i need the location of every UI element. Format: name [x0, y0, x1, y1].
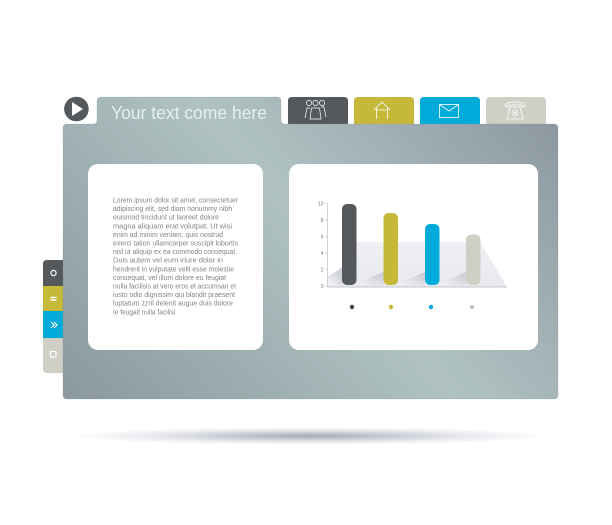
tab: home: [354, 97, 414, 124]
y axis: [318, 201, 328, 290]
text block: nisl ut aliquip ex ea commodo consequat.: [113, 249, 237, 256]
y axis: 10: [318, 201, 324, 207]
bar: 6: [466, 234, 480, 285]
text block: nulla facilisis at vero eros et accumsan et: [113, 284, 236, 290]
side tab: equals: [43, 286, 64, 311]
text block: hendrerit in vulputate velit esse molestie: [113, 266, 234, 273]
main panel with title tab: [63, 97, 558, 399]
y axis: 8: [321, 218, 324, 224]
y axis: 0: [321, 284, 324, 290]
text block: iusto odio dignissim qui blandit praesent: [113, 292, 235, 299]
bar: 10: [342, 204, 356, 285]
title: Your text come here: [111, 103, 267, 123]
tab: phone: [486, 97, 546, 124]
side tab: chevrons: [43, 311, 64, 338]
text block: [113, 198, 239, 316]
side tab: square: [43, 338, 64, 373]
panel: chart: [289, 164, 538, 350]
y axis: 4: [321, 251, 324, 257]
icon: house: [374, 102, 390, 119]
text block: Lorem ipsum dolor sit amet, consectetuer: [113, 198, 239, 204]
text block: enim ad minim veniam, quis nostrud: [113, 232, 223, 239]
panel: text: [88, 164, 263, 350]
side tabs: [43, 260, 64, 373]
icon: telephone: [505, 102, 525, 119]
text block: Duis autem vel eum iriure dolor in: [113, 258, 223, 265]
chart floor: [327, 242, 507, 287]
bar chart: [318, 201, 507, 309]
text block: luptatum zzril delenit augue duis dolore: [113, 301, 233, 308]
bar shadows: [328, 268, 466, 285]
y axis: 6: [321, 234, 324, 240]
text block: adipiscing elit, sed diam nonummy nibh: [113, 206, 232, 213]
side tab: circle: [43, 260, 64, 286]
text block: magna aliquam erat volutpat. Ut wisi: [113, 223, 232, 230]
tab: mail: [420, 97, 480, 124]
bar: 7.5: [425, 224, 440, 285]
ground shadow: [72, 427, 548, 445]
icon: people: [305, 100, 326, 119]
bar: 9: [384, 213, 398, 285]
text block: consequat, vel illum dolore eu feugiat: [113, 275, 226, 282]
tab: team: [288, 97, 348, 124]
y axis: 2: [321, 267, 324, 273]
legend dots: [350, 305, 474, 309]
top tabs: [288, 97, 546, 124]
floor edge: [327, 286, 507, 288]
text block: exerci tation ullamcorper suscipit lobortis: [113, 240, 238, 248]
icon: envelope: [440, 104, 458, 118]
text block: euismod tincidunt ut laoreet dolore: [113, 215, 219, 222]
text block: te feugait nulla facilisi.: [113, 309, 177, 316]
play button: [64, 97, 89, 121]
